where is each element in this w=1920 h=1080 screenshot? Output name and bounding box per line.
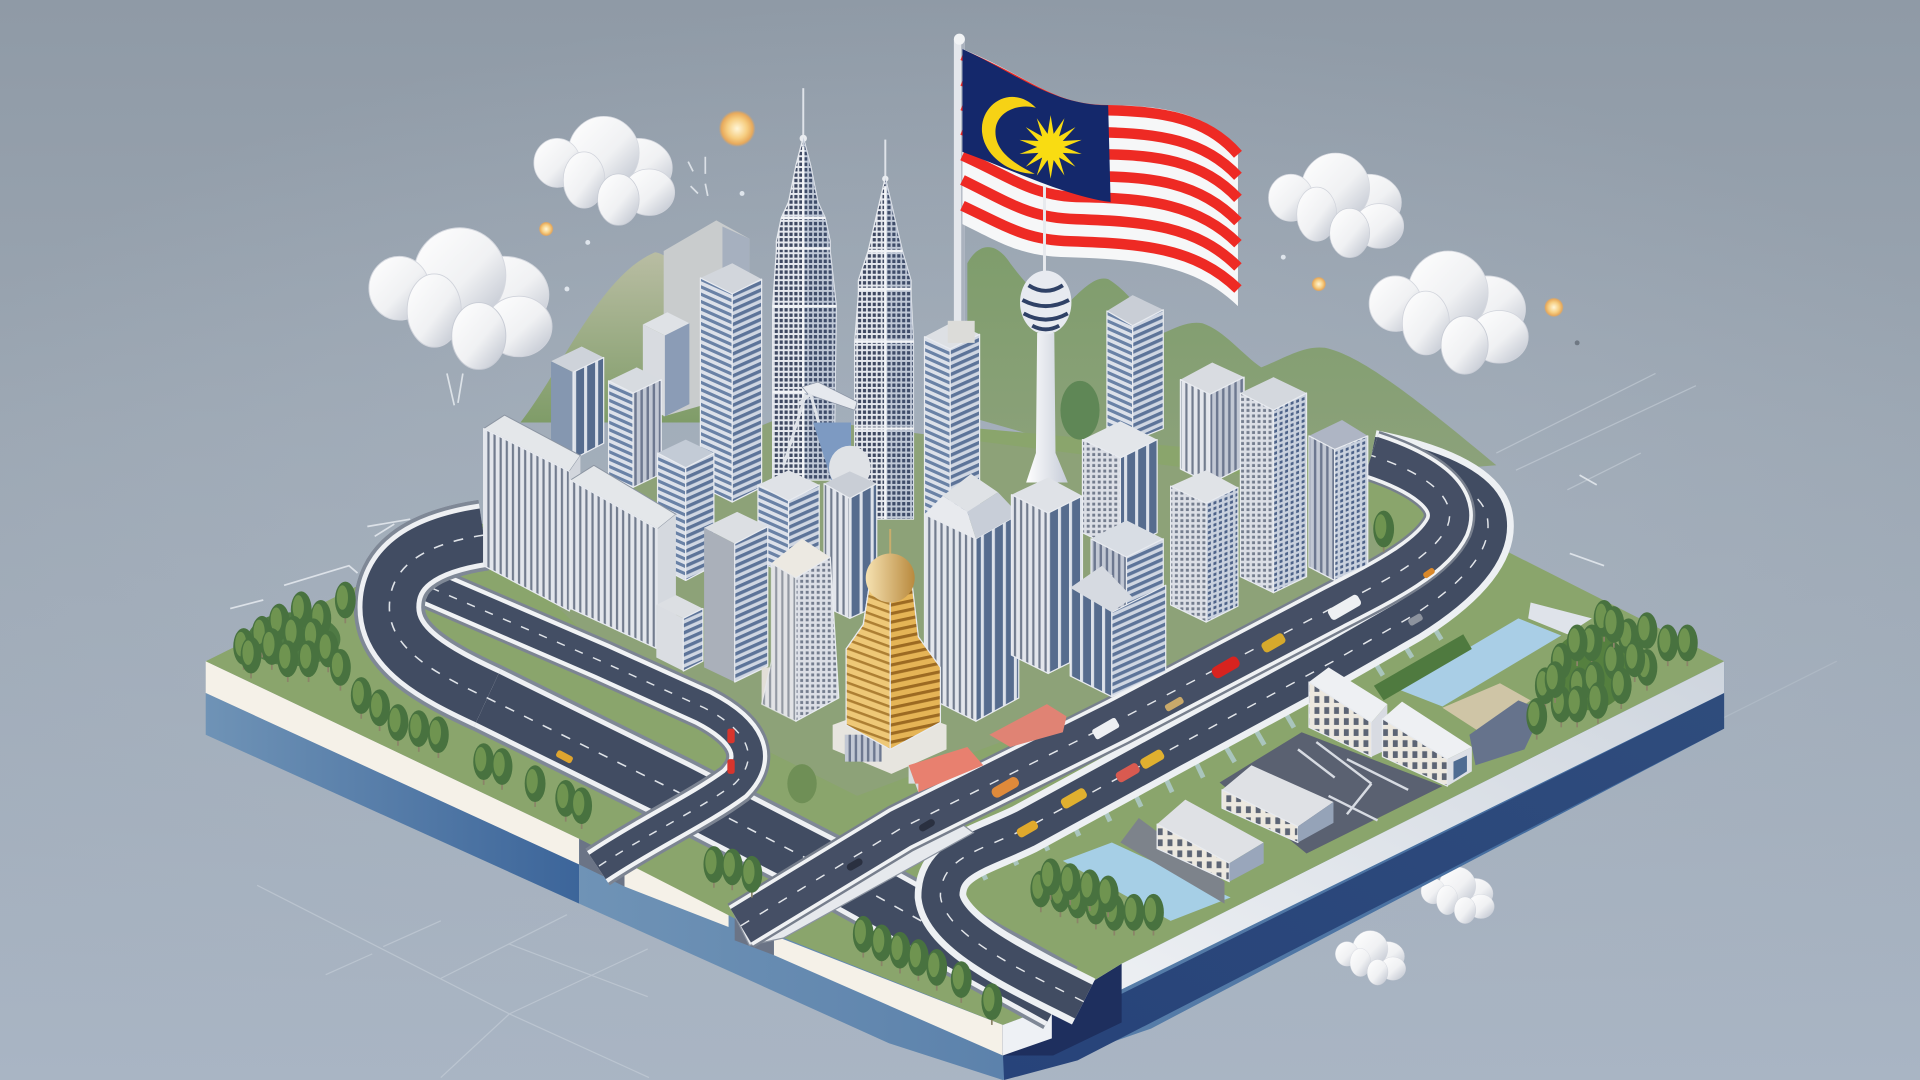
building: back left blue — [551, 347, 604, 459]
building: large central with KL tower base — [924, 474, 1019, 721]
building: cream tower — [762, 539, 839, 721]
gold building — [833, 529, 947, 774]
road: loop overlap covering the ramp start — [389, 535, 487, 698]
building: small front grey — [656, 595, 703, 671]
flag pole — [948, 34, 975, 343]
building: far right — [1309, 420, 1368, 580]
road: inner curved ramp — [431, 588, 748, 867]
faint ground grid lines — [257, 373, 1837, 1078]
platform side walls — [206, 661, 1724, 1080]
white apartment blocks — [1309, 667, 1472, 786]
Petronas tower left — [773, 88, 836, 480]
clouds — [369, 116, 1528, 985]
water and lower right lots — [1063, 602, 1592, 921]
building: tall striped — [700, 263, 762, 502]
red roofs — [909, 704, 1067, 792]
building: small striped centre — [758, 470, 819, 576]
building: tall grid — [1240, 377, 1307, 593]
building: grid front — [1171, 470, 1238, 622]
building: light mid — [643, 312, 689, 416]
building: domed — [824, 446, 877, 618]
low office buildings — [1157, 765, 1333, 882]
building: back right — [1107, 295, 1163, 441]
highway: upper carriageway — [741, 456, 1450, 926]
building: blue mid right — [1082, 421, 1157, 551]
building: right rear block — [1180, 362, 1244, 484]
road: outer left loop — [389, 535, 1060, 998]
highway piers — [980, 618, 1457, 872]
hills — [520, 247, 1496, 490]
highway: left underpass slab — [735, 808, 973, 945]
Malaysian flag — [962, 49, 1238, 306]
building: wide white left — [484, 415, 580, 611]
small white scribble marks — [230, 157, 1604, 609]
highway: lower carriageway and ramp — [940, 456, 1488, 1002]
background grey tower — [664, 220, 749, 416]
building: stripes striped left — [658, 440, 714, 580]
building: KL tower base block — [1011, 478, 1082, 673]
building: grey striped — [704, 512, 768, 682]
plaza under the towers — [490, 416, 1390, 796]
building: right of towers — [924, 322, 980, 527]
Petronas tower right — [855, 140, 913, 519]
glowing orbs — [539, 110, 1580, 345]
building: wide white second — [571, 465, 676, 649]
vehicles — [555, 567, 1436, 872]
KL tower — [1020, 186, 1071, 482]
building: stepped right — [1070, 520, 1166, 697]
building: striped back — [609, 367, 661, 487]
platform ground — [206, 429, 1724, 1025]
trees — [233, 381, 1698, 1025]
Petronas skybridge — [784, 382, 857, 484]
